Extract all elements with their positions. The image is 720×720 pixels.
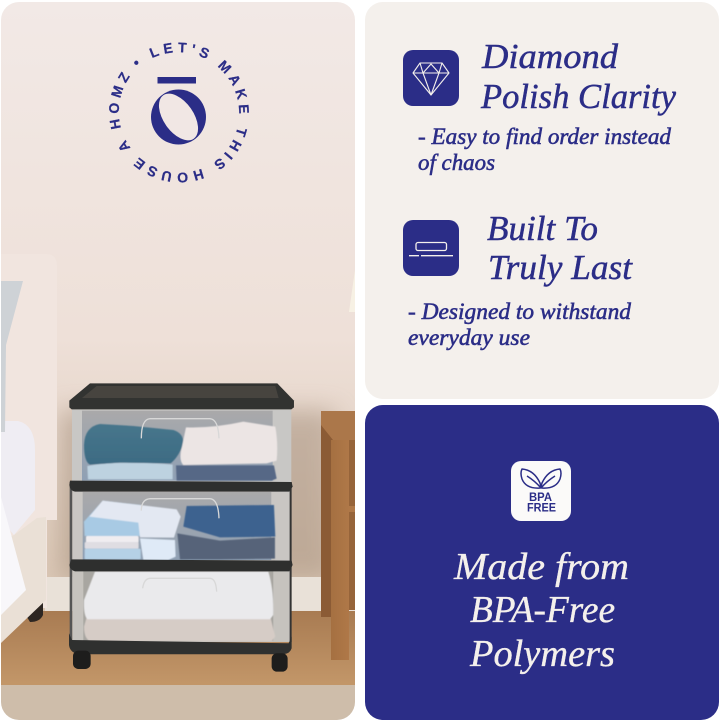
panel: bpa free [365, 405, 719, 720]
logo ring inner [151, 87, 206, 147]
lid inset [82, 386, 279, 398]
handle [141, 499, 219, 518]
clothes: pale blue fold [87, 463, 173, 479]
text: designed to withstand: - Designed to withstand [408, 299, 631, 324]
mattress [1, 421, 35, 535]
text: easy to find [418, 124, 672, 175]
heading: built to truly last [487, 209, 633, 287]
clothes: slate fold [176, 465, 277, 481]
heading: built to truly last: Built To [487, 209, 598, 248]
left post [70, 482, 72, 642]
logo bar [158, 77, 196, 84]
heading: built to truly last: Truly Last [488, 248, 633, 287]
clothes: teal stack [84, 424, 183, 465]
icon: bpa free badge: BPA [529, 490, 552, 504]
heading: made from bpa-free polymers [453, 546, 629, 675]
heading: made from bpa-free polymers: Made from [453, 546, 629, 588]
rail 2 [69, 481, 293, 492]
logo: circular badge [109, 42, 249, 183]
heading: made from bpa-free polymers: Polymers [469, 633, 615, 675]
text: designed to withstand: everyday use [408, 325, 530, 350]
blanket [1, 497, 26, 615]
handle [143, 578, 217, 592]
icon: bpa free badge: FREE [527, 500, 556, 514]
icon: built to last [403, 220, 459, 276]
logo ring [151, 90, 206, 144]
bed foot [28, 603, 43, 622]
bed frame [1, 517, 46, 643]
clothes: navy stack [183, 505, 275, 537]
right post [289, 482, 292, 642]
heading: made from bpa-free polymers: BPA-Free [470, 589, 615, 631]
circular slogan: • LET'S MAKE THIS HOUSE A HOMZ [109, 42, 249, 183]
heading: diamond polish clarity [480, 37, 676, 116]
icon: bpa free badge [511, 461, 571, 521]
clothes: striped stack [84, 504, 140, 536]
bed [1, 254, 57, 643]
clothes: white fold [180, 422, 277, 465]
panel: product photo [1, 2, 355, 720]
handle [141, 419, 219, 438]
drawer 3 [72, 569, 290, 642]
pillow [1, 281, 23, 432]
drawer 1 [72, 409, 291, 483]
bottom rail [69, 633, 292, 654]
lamp edge [349, 270, 355, 312]
towel: white [84, 572, 273, 619]
wheel right [272, 653, 288, 672]
wheel left [73, 651, 91, 669]
baseboard [45, 577, 355, 611]
heading: diamond polish clarity: Polish Clarity [480, 77, 676, 116]
panel: features [365, 2, 719, 399]
headboard [5, 345, 57, 608]
nightstand [321, 411, 355, 660]
icon: diamond [403, 50, 459, 106]
text: easy to find: of chaos [418, 150, 495, 175]
wall [1, 2, 355, 612]
towel: beige [84, 618, 275, 641]
rail 3 [69, 559, 293, 571]
clothes: slate stack [177, 533, 275, 559]
lid [69, 383, 294, 409]
storage drawer unit [69, 383, 294, 672]
text: designed to withstand [408, 299, 631, 350]
rug [1, 685, 355, 720]
text: easy to find: - Easy to find order instead [418, 124, 672, 149]
drawer 2 [72, 490, 290, 562]
heading: diamond polish clarity: Diamond [481, 37, 619, 76]
floor [1, 611, 355, 686]
